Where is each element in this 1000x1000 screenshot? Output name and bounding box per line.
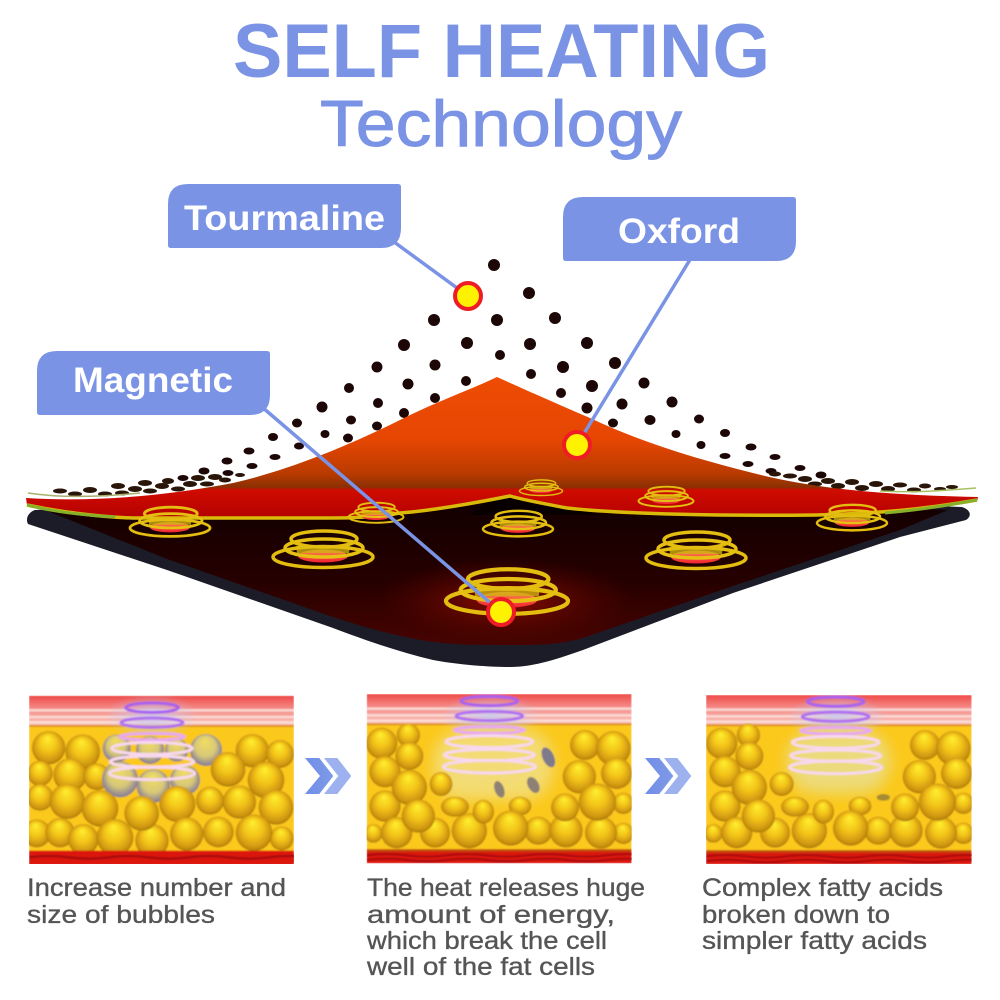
- subtitle: Technology: Technology: [320, 87, 683, 160]
- green layer tips: [27, 500, 977, 517]
- diagram: layered heating pad: [26, 259, 978, 667]
- callout: Tourmaline: Tourmaline: [184, 199, 385, 238]
- caption 2: The heat releases huge: [367, 874, 645, 902]
- caption 3: broken down to: [702, 901, 890, 929]
- yellow layer edge: [27, 496, 977, 518]
- oxford red and orange layer: [26, 377, 978, 518]
- caption 1: size of bubbles: [27, 901, 215, 929]
- dense dotted strip: right: [769, 472, 976, 492]
- magnetic studs: [130, 480, 887, 614]
- panel 3: fatty acids broken down: [704, 693, 987, 864]
- panel 1: fat cells with bubbles: [23, 693, 309, 865]
- caption 3: simpler fatty acids: [702, 927, 927, 955]
- callout: Magnetic: [37, 351, 514, 625]
- callout: Oxford: [563, 197, 796, 458]
- caption 2: [366, 874, 645, 981]
- caption 3: Complex fatty acids: [702, 874, 943, 902]
- callout: Oxford: Oxford: [618, 212, 740, 251]
- caption 3: [702, 874, 943, 955]
- caption 2: which break the cell: [366, 927, 607, 955]
- title: SELF HEATING: SELF HEATING: [233, 9, 770, 94]
- callout: Tourmaline: [168, 184, 481, 309]
- caption 2: well of the fat cells: [366, 953, 595, 981]
- arrow: second chevrons: [645, 758, 691, 794]
- dotted tourmaline sheet: [178, 259, 826, 481]
- callout: Magnetic: Magnetic: [73, 361, 233, 400]
- caption 1: Increase number and: [27, 874, 286, 902]
- pad base layer: [27, 490, 970, 667]
- panel 2: heat releases energy: [364, 693, 647, 863]
- caption 1: [27, 874, 286, 929]
- arrow: first chevrons: [305, 758, 351, 794]
- caption 2: amount of energy,: [367, 901, 615, 929]
- dense dotted strip: left: [28, 473, 245, 496]
